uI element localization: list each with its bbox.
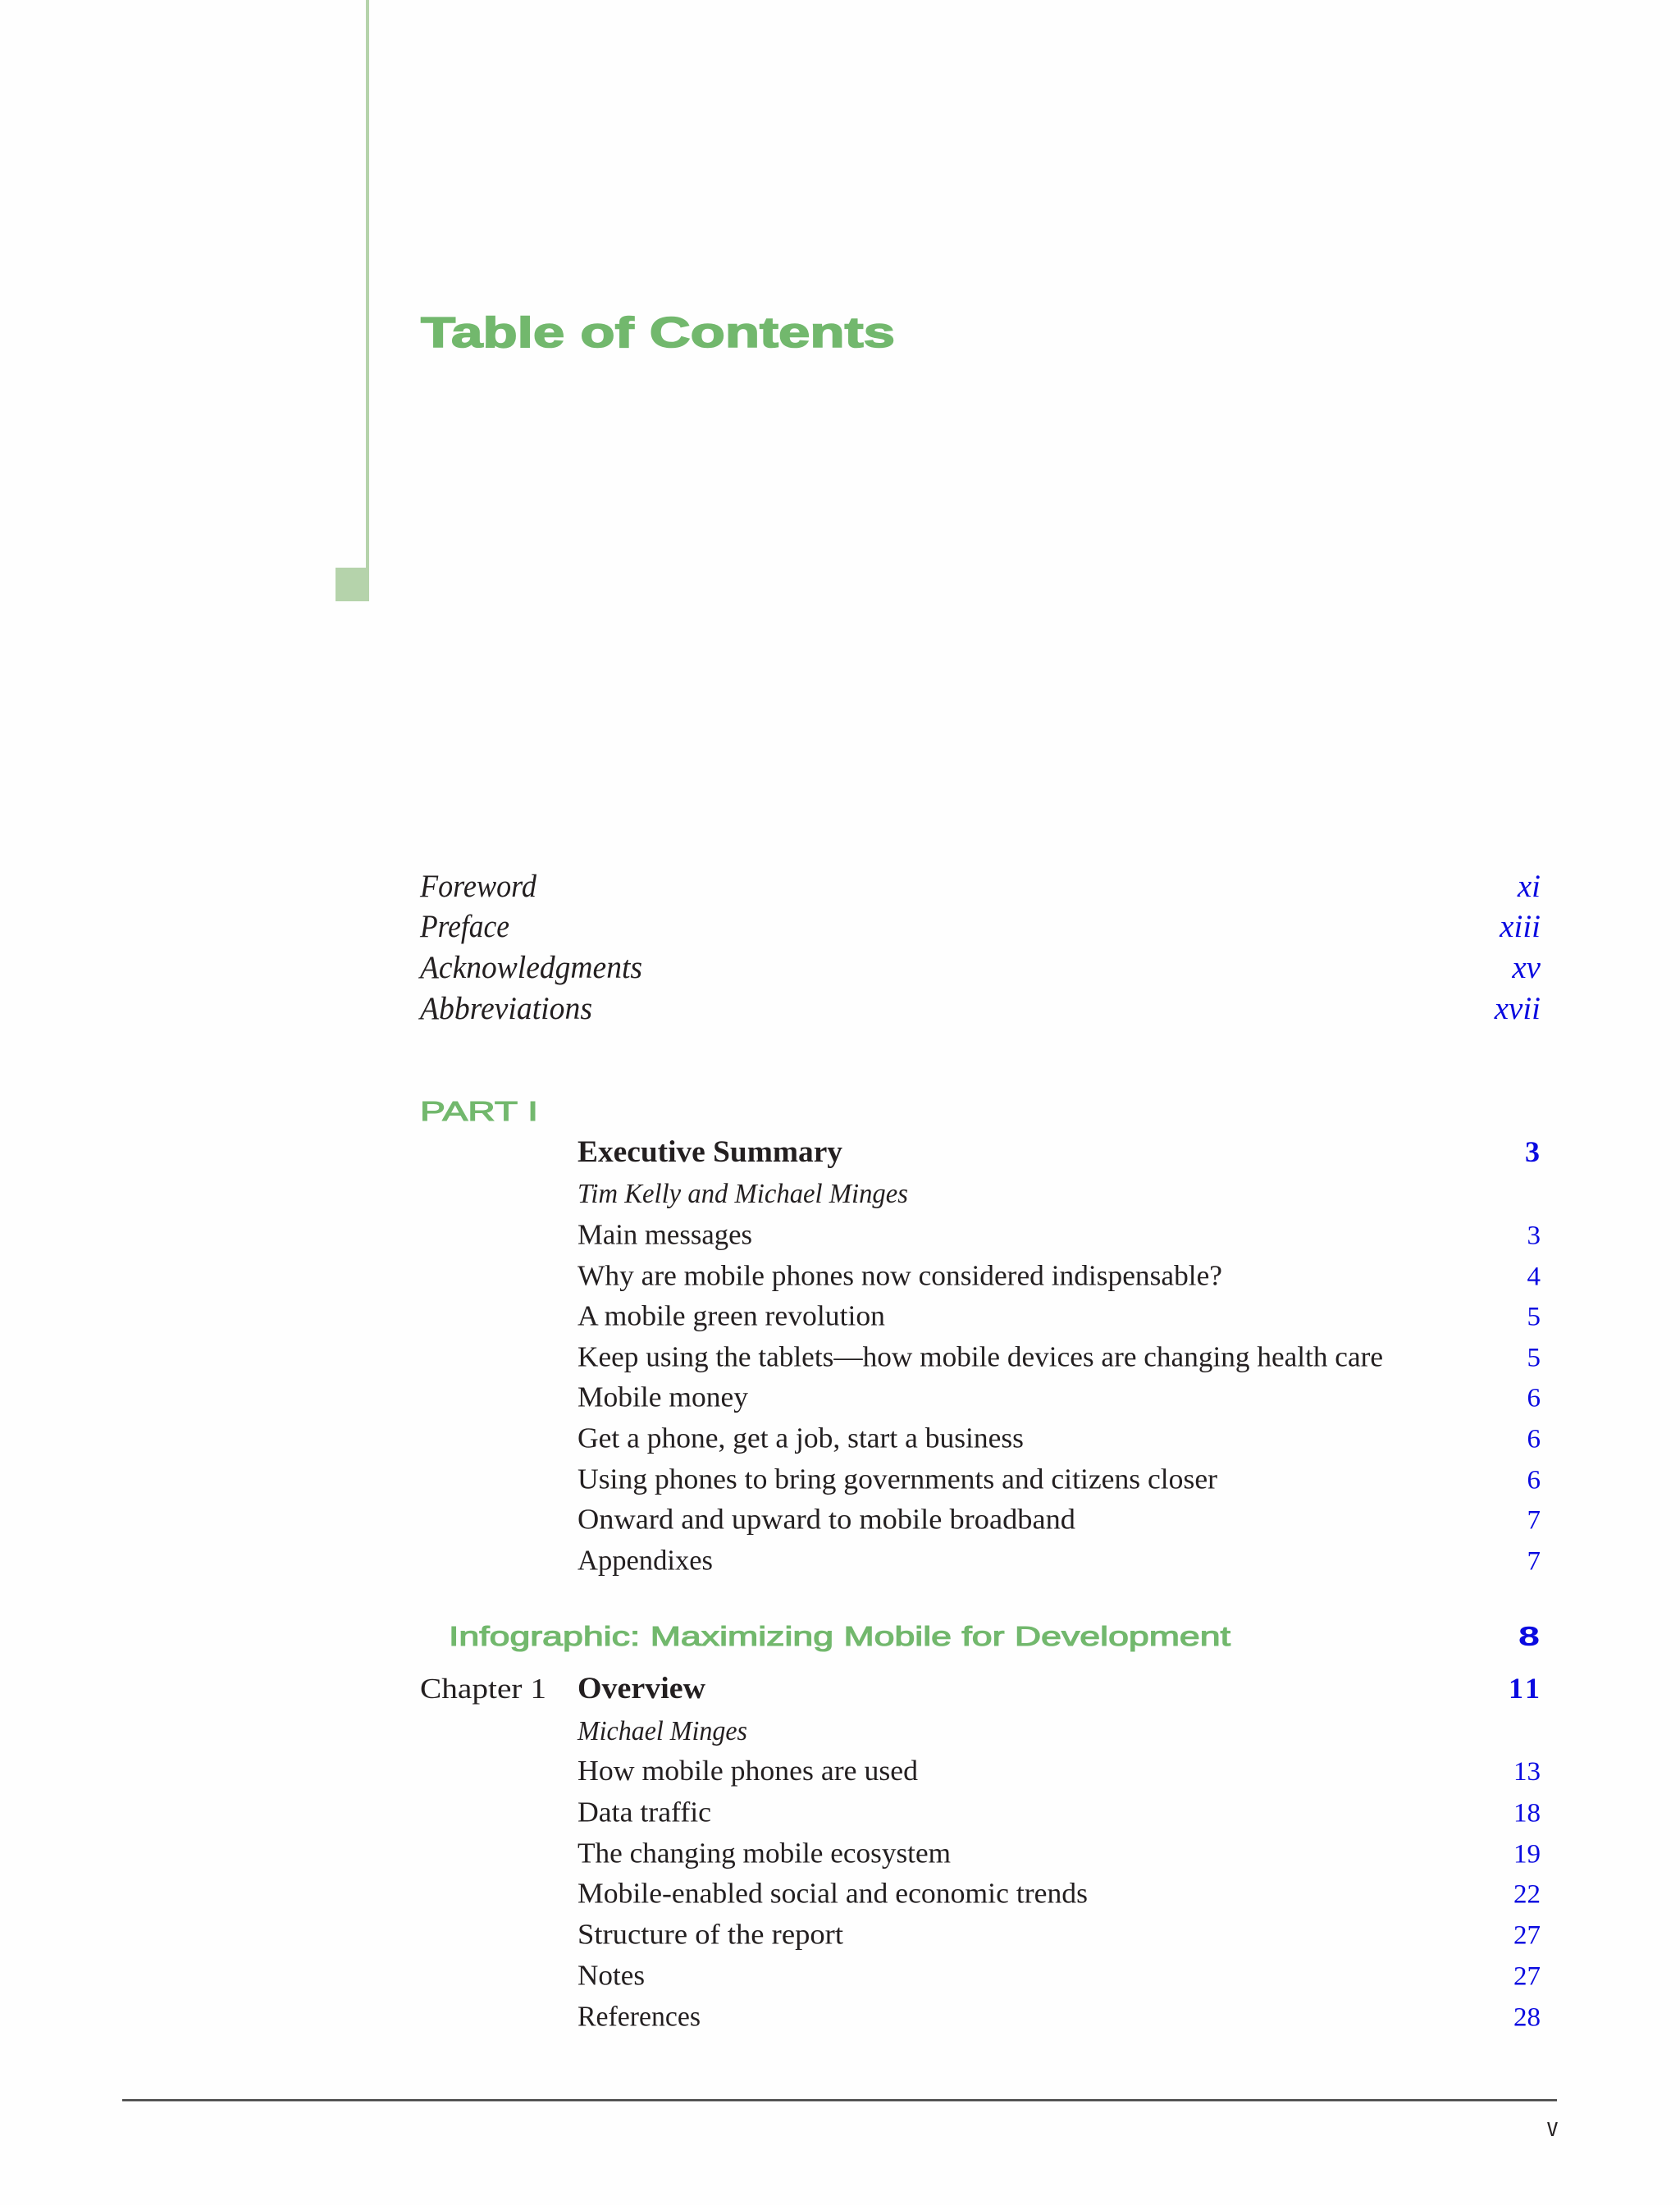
entry: A mobile green revolution bbox=[578, 1299, 1541, 1332]
authors: Tim Kelly and Michael Minges: Tim Kelly and Michael Minges bbox=[578, 1179, 908, 1209]
entry: Structure of the report: 27 bbox=[1513, 1921, 1541, 1951]
entry: Main messages: Main messages bbox=[578, 1219, 752, 1250]
entry: Using phones to bring governments and citizens closer: 6 bbox=[1527, 1465, 1541, 1495]
entry: Data traffic: Data traffic bbox=[578, 1796, 711, 1828]
entry: Notes: Notes bbox=[578, 1959, 645, 1992]
entry: Preface bbox=[419, 909, 1541, 944]
entry: Notes: 27 bbox=[1513, 1962, 1541, 1992]
entry: Get a phone, get a job, start a business: Get a phone, get a job, start a business bbox=[578, 1422, 1024, 1454]
entry: Abbreviations bbox=[418, 991, 1541, 1026]
entry: Mobile-enabled social and economic trends bbox=[578, 1877, 1541, 1910]
entry: Infographic heading: 8 bbox=[1518, 1621, 1540, 1651]
entry: Using phones to bring governments and citizens closer bbox=[578, 1463, 1541, 1495]
entry: Executive Summary heading: Executive Summary bbox=[578, 1135, 842, 1169]
entry: Executive Summary heading: 3 bbox=[1525, 1135, 1540, 1168]
entry: Mobile money: 6 bbox=[1527, 1383, 1541, 1413]
entry: Onward and upward to mobile broadband: Onward and upward to mobile broadband bbox=[578, 1503, 1076, 1536]
entry: Executive Summary heading bbox=[578, 1135, 1540, 1169]
entry: How mobile phones are used: How mobile phones are used bbox=[578, 1755, 919, 1787]
footer rule bbox=[122, 2099, 1557, 2102]
entry: Get a phone, get a job, start a business bbox=[578, 1422, 1541, 1454]
entry: Notes bbox=[578, 1959, 1541, 1992]
heading: Part I: PART I bbox=[420, 1096, 538, 1126]
entry: Get a phone, get a job, start a business: 6 bbox=[1527, 1424, 1541, 1454]
entry: Foreword bbox=[419, 869, 1541, 904]
entry: Preface: xiii bbox=[1499, 909, 1541, 944]
entry: Abbreviations: xvii bbox=[1494, 991, 1541, 1026]
entry: The changing mobile ecosystem: The changing mobile ecosystem bbox=[578, 1838, 951, 1869]
entry: Appendixes: 7 bbox=[1527, 1547, 1541, 1577]
entry: Mobile money bbox=[578, 1381, 1541, 1413]
entry: Foreword: Foreword bbox=[419, 869, 536, 904]
entry: References: 28 bbox=[1513, 2003, 1541, 2033]
entry: Preface: Preface bbox=[419, 909, 509, 944]
entry: Main messages bbox=[578, 1219, 1541, 1250]
entry: The changing mobile ecosystem: 19 bbox=[1513, 1839, 1541, 1869]
entry: Abbreviations: Abbreviations bbox=[418, 991, 592, 1026]
author: Michael Minges: Michael Minges bbox=[577, 1716, 747, 1746]
entry: A mobile green revolution: A mobile green revolution bbox=[578, 1299, 885, 1332]
section: Chapter 1 bbox=[420, 1672, 1541, 2033]
entry: Why are mobile phones now considered indispensable?: 4 bbox=[1527, 1262, 1541, 1291]
entry: Overview heading: Overview bbox=[578, 1672, 705, 1705]
entry: Infographic heading: Infographic: Maximizing Mobile for Development bbox=[449, 1621, 1230, 1651]
entry: Keep using the tablets: 5 bbox=[1527, 1344, 1541, 1373]
entry: Data traffic: 18 bbox=[1513, 1798, 1541, 1828]
entry: How mobile phones are used: 13 bbox=[1513, 1757, 1541, 1787]
entry: Main messages: 3 bbox=[1527, 1221, 1541, 1250]
entry: Structure of the report bbox=[578, 1918, 1541, 1951]
entry: Acknowledgments: xv bbox=[1511, 950, 1541, 985]
entry: Acknowledgments: Acknowledgments bbox=[418, 950, 642, 985]
entry: Appendixes bbox=[578, 1544, 1541, 1577]
title: Table of Contents bbox=[421, 309, 895, 357]
entry: Mobile money: Mobile money bbox=[578, 1381, 748, 1413]
entry: References bbox=[578, 2000, 1541, 2033]
entry: Structure of the report: Structure of the report bbox=[578, 1918, 843, 1951]
page number: v bbox=[1547, 2112, 1558, 2142]
entry: Keep using the tablets: Keep using the tablets—how mobile devices are changing health care bbox=[578, 1340, 1383, 1373]
entry: Overview heading bbox=[578, 1672, 1540, 1705]
chapter label: Chapter 1 bbox=[420, 1673, 546, 1705]
entry: Mobile-enabled social and economic trends: 22 bbox=[1513, 1880, 1541, 1910]
section: Executive Summary bbox=[578, 1135, 1541, 1577]
entry: Using phones to bring governments and citizens closer: Using phones to bring governments and citizens closer bbox=[578, 1463, 1217, 1495]
entry: How mobile phones are used bbox=[578, 1755, 1541, 1787]
entry: Infographic heading bbox=[449, 1621, 1540, 1651]
entry: Overview heading: 11 bbox=[1509, 1672, 1540, 1705]
entry: Data traffic bbox=[578, 1796, 1541, 1828]
entry: Why are mobile phones now considered indispensable? bbox=[578, 1260, 1541, 1291]
entry: The changing mobile ecosystem bbox=[578, 1838, 1541, 1869]
entry: Onward and upward to mobile broadband: 7 bbox=[1527, 1506, 1541, 1536]
entry: References: References bbox=[578, 2000, 701, 2033]
front matter list bbox=[418, 869, 1541, 1026]
entry: Appendixes: Appendixes bbox=[578, 1544, 713, 1577]
entry: Foreword: xi bbox=[1517, 869, 1541, 904]
entry: A mobile green revolution: 5 bbox=[1527, 1303, 1541, 1332]
entry: Acknowledgments bbox=[418, 950, 1541, 985]
entry: Onward and upward to mobile broadband bbox=[578, 1503, 1541, 1536]
entry: Why are mobile phones now considered indispensable?: Why are mobile phones now considered indispensable? bbox=[578, 1260, 1222, 1291]
header decoration: vertical bar and square bbox=[336, 0, 369, 601]
entry: Mobile-enabled social and economic trends: Mobile-enabled social and economic trends bbox=[578, 1877, 1088, 1910]
